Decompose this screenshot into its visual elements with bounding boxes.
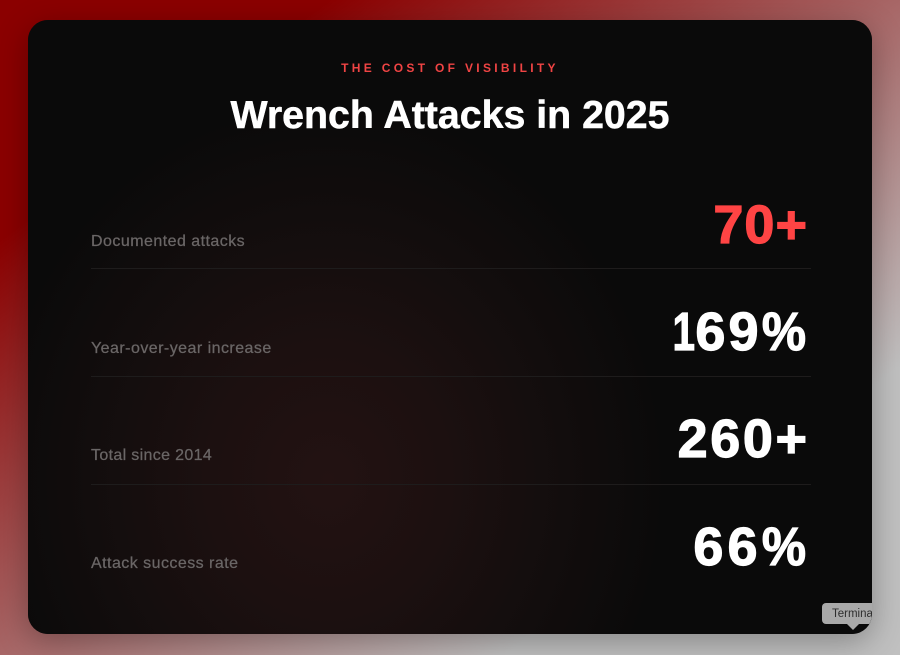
label: attack success rate: Attack success rate [91, 555, 238, 572]
value: 169%: 69 [695, 302, 761, 362]
label: documented attacks: Documented attacks [91, 233, 245, 250]
value: 70+: 70+ [713, 195, 808, 255]
label: year-over-year increase: Year-over-year increase [91, 340, 272, 357]
value: 169% [673, 302, 806, 362]
label: total since 2014: Total since 2014 [91, 447, 212, 464]
value: 169%: % [762, 302, 806, 362]
value: 66% [693, 517, 806, 577]
icon: tooltip pointer [847, 624, 859, 630]
tooltip: Termina [832, 608, 872, 620]
eyebrow label: THE COST OF VISIBILITY [341, 61, 559, 75]
value: 169%: 1 [673, 302, 695, 362]
tooltip [822, 603, 872, 624]
title: Wrench Attacks in 2025 [230, 93, 670, 137]
value: 66%: % [762, 517, 806, 577]
value: 66%: 66 [693, 517, 761, 577]
value: 260+: 260+ [678, 409, 810, 469]
